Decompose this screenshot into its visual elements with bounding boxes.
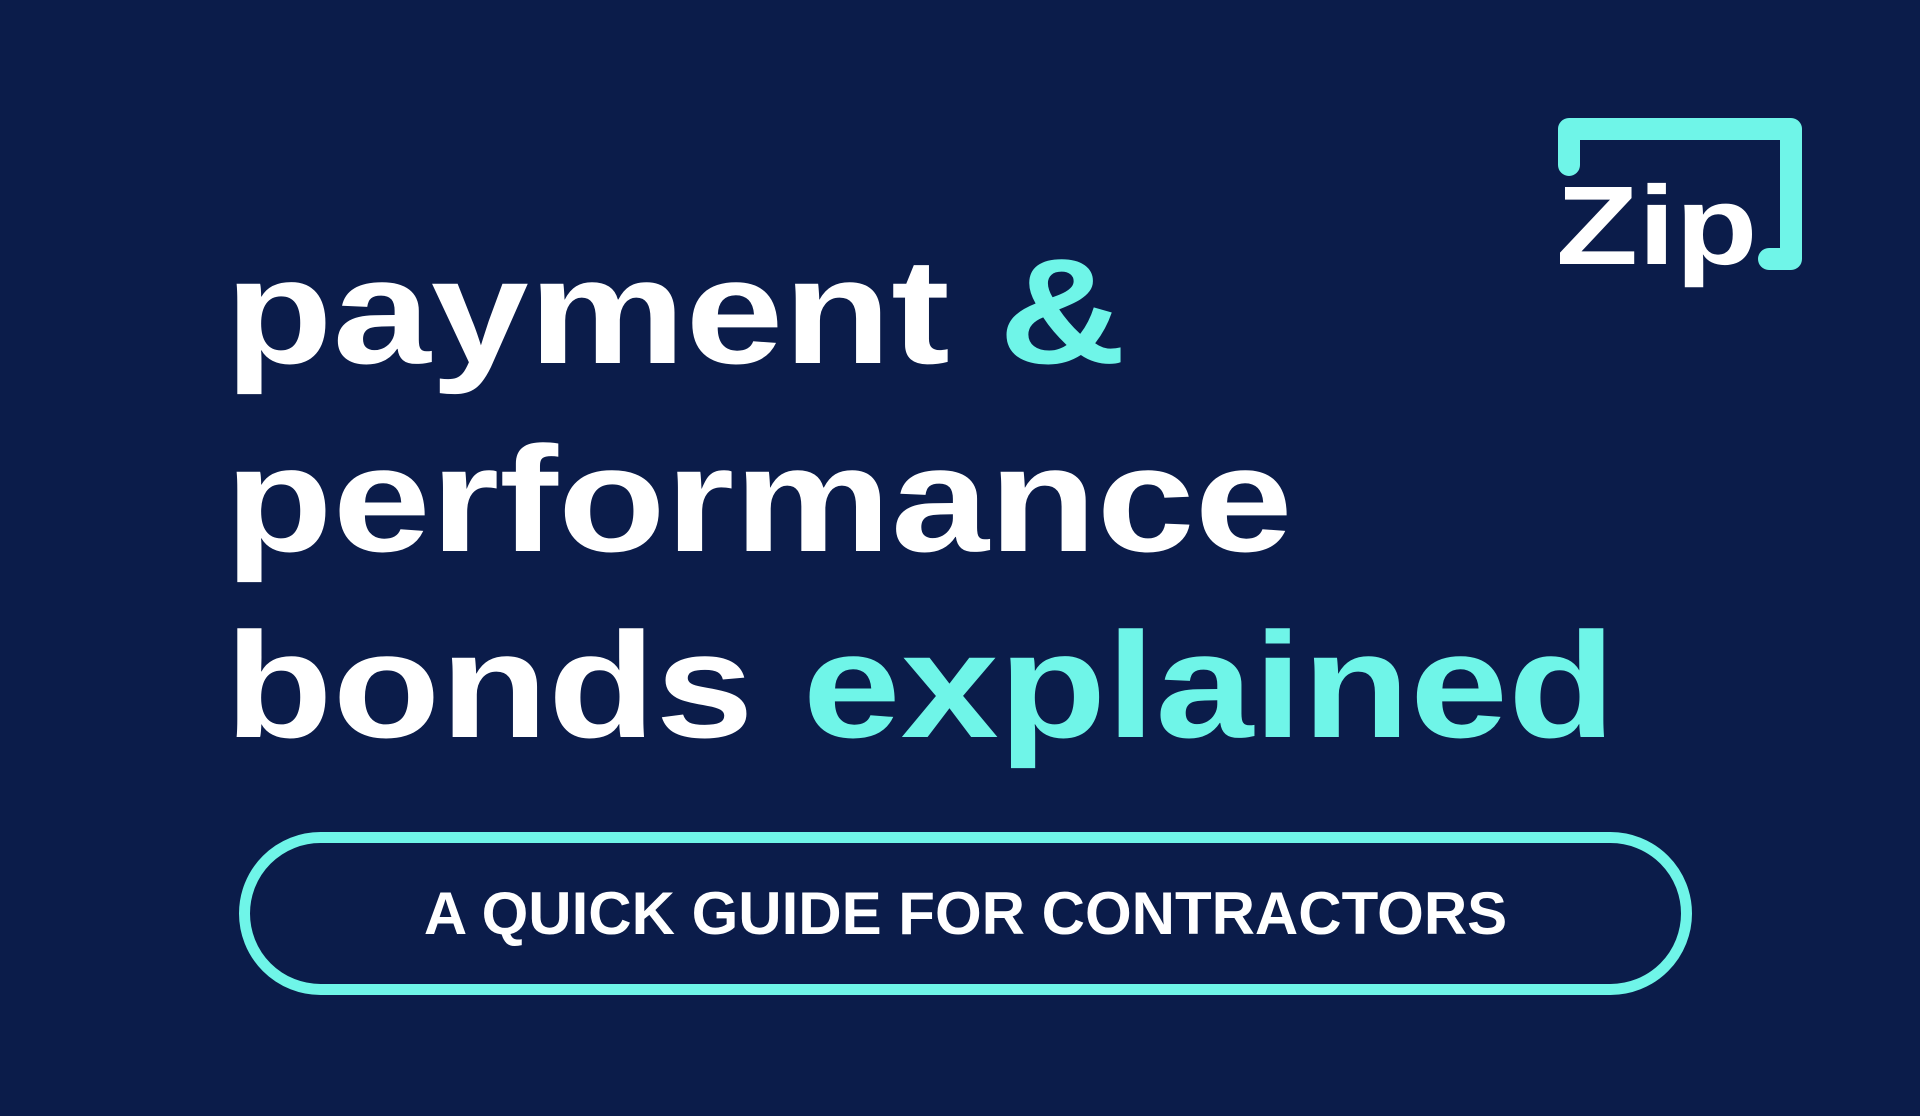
subtitle pill: A QUICK GUIDE FOR CONTRACTORS [424,880,1507,947]
logo: Zip [1556,118,1802,288]
icon: bracket [1569,129,1791,259]
title line 2: performance [225,415,1293,583]
subtitle pill [239,832,1692,995]
title line 3: bonds explained [225,601,1616,769]
logo text: Zip [1556,164,1758,288]
title line 1: payment & [225,227,1126,395]
